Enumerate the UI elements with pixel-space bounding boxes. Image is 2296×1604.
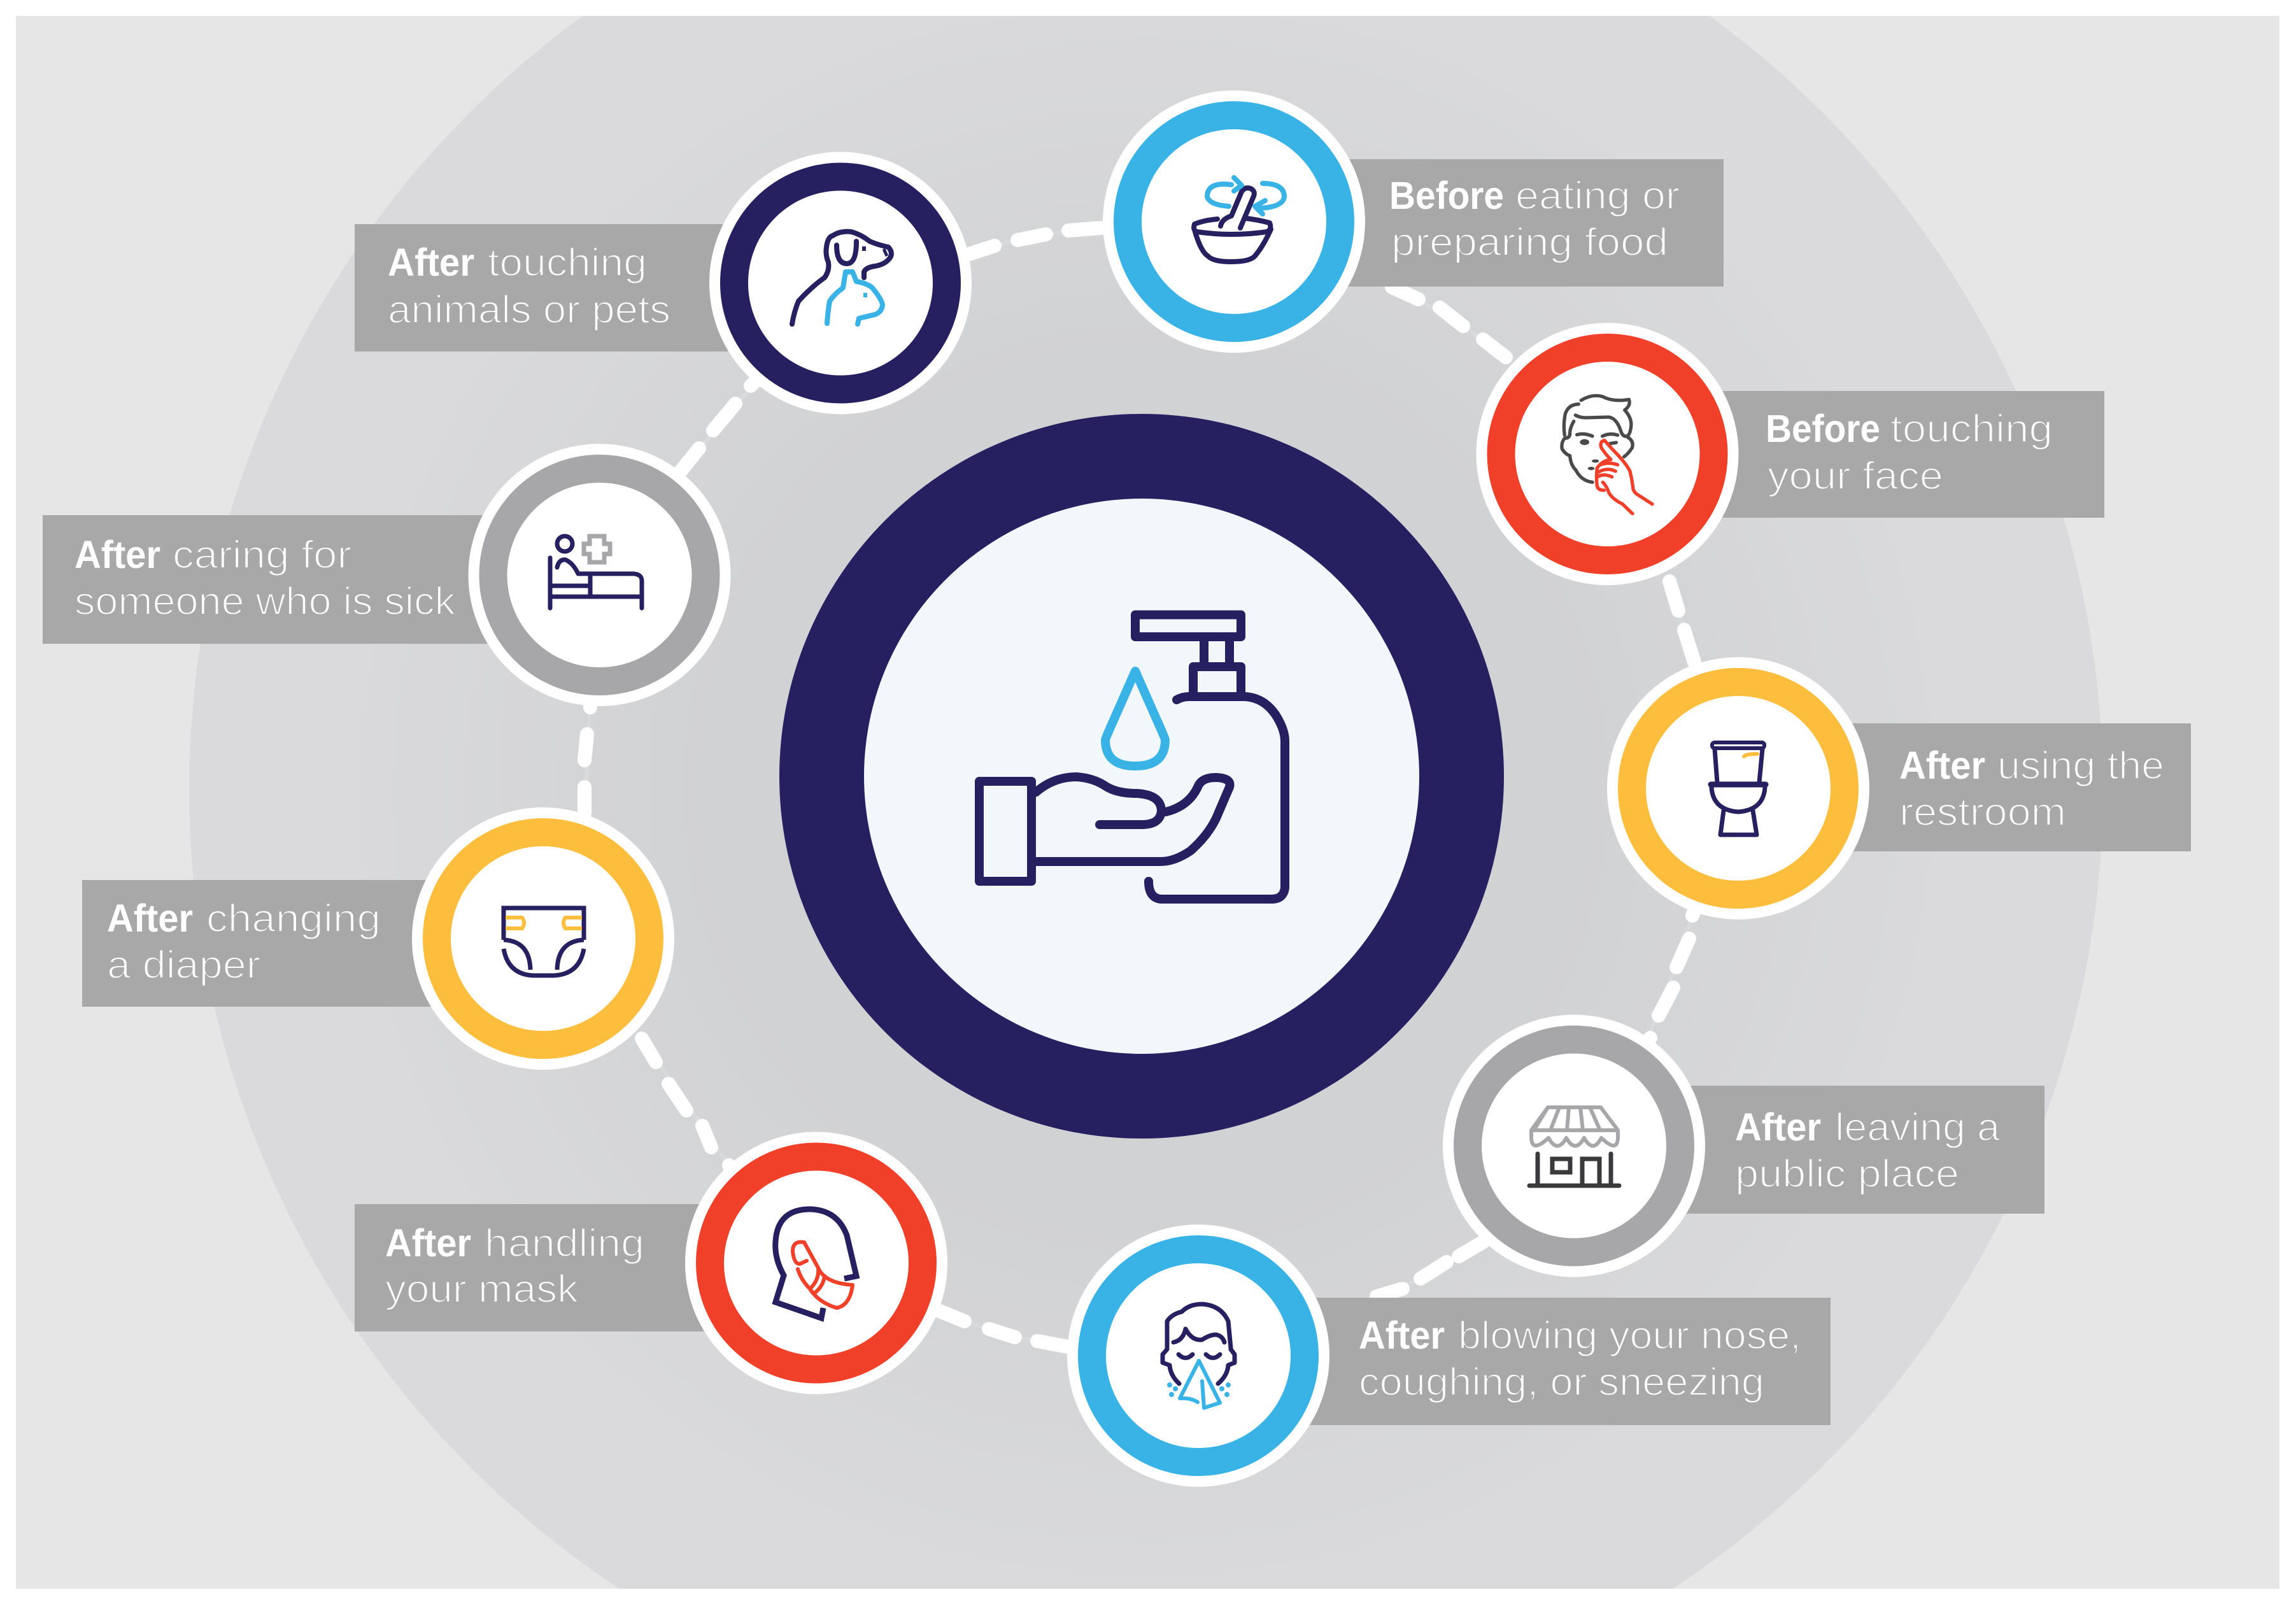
label text	[1766, 407, 2053, 497]
icon: bowl and spoon	[1194, 178, 1284, 262]
step: after touching animals or pets	[355, 152, 972, 414]
label bar	[355, 1204, 816, 1331]
label text: a diaper	[107, 943, 260, 986]
icon: storefront	[1529, 1107, 1619, 1186]
central ring	[779, 414, 1504, 1139]
label text: eating or	[1515, 174, 1680, 217]
label text: someone who is sick	[74, 579, 456, 623]
ring	[685, 1132, 947, 1395]
label bar	[1607, 391, 2104, 518]
step: after leaving a public place	[1443, 1015, 2044, 1277]
label text	[1359, 1314, 1801, 1403]
step: after handling your mask	[355, 1132, 947, 1395]
step: before touching your face	[1476, 323, 2104, 585]
label text	[1899, 744, 2164, 834]
ring	[1607, 657, 1869, 919]
label text: changing	[206, 897, 381, 940]
label text	[1735, 1105, 2000, 1195]
icon: toilet	[1711, 742, 1766, 835]
label text	[74, 533, 456, 623]
label bar	[1574, 1086, 2044, 1214]
icon: patient in bed	[550, 536, 642, 608]
label text	[385, 1221, 644, 1310]
label bar	[82, 880, 543, 1007]
label bar	[1198, 1298, 1831, 1425]
label text: After	[385, 1221, 471, 1265]
label text: Before	[1766, 407, 1880, 450]
label bar	[1234, 159, 1724, 287]
label text: coughing, or sneezing	[1359, 1360, 1764, 1403]
icon: hand and soap dispenser	[979, 615, 1285, 899]
ring	[1476, 323, 1738, 585]
label text: After	[1899, 744, 1985, 787]
ring	[1103, 90, 1365, 353]
step: after caring for someone who is sick	[43, 444, 731, 706]
label text: After	[1359, 1314, 1445, 1357]
label text	[1389, 174, 1680, 264]
label bar	[43, 515, 600, 644]
label text: restroom	[1899, 790, 2066, 834]
label text: handling	[485, 1221, 644, 1265]
ring	[1443, 1015, 1705, 1277]
step: before eating or preparing food	[1103, 90, 1724, 353]
label text: Before	[1389, 174, 1504, 217]
icon: water drop	[1105, 671, 1165, 766]
label text: After	[74, 533, 160, 576]
label text: your face	[1768, 454, 1943, 497]
step: after blowing your nose, coughing, or sneezing	[1067, 1224, 1831, 1487]
icon: dispenser bottle	[1135, 615, 1285, 899]
dashed connector ring	[585, 228, 1696, 1347]
icon: head with mask	[776, 1209, 856, 1318]
label bar	[355, 224, 840, 351]
label text: After	[388, 241, 474, 284]
label text: leaving a	[1835, 1105, 2000, 1149]
label text: caring for	[173, 533, 351, 576]
ring	[709, 152, 972, 414]
icon: person sneezing into tissue	[1163, 1304, 1235, 1408]
label text: touching	[1890, 407, 2053, 450]
label text: using the	[1997, 744, 2164, 787]
ring	[469, 444, 731, 706]
icon: face and hand	[1562, 395, 1652, 514]
label text: touching	[488, 241, 647, 284]
label bar	[1738, 723, 2191, 851]
label text: your mask	[385, 1267, 579, 1310]
label text: After	[107, 897, 193, 940]
ring	[412, 807, 674, 1070]
label text: animals or pets	[388, 288, 670, 331]
step: after using the restroom	[1607, 657, 2191, 919]
label text	[107, 897, 381, 986]
label text: preparing food	[1391, 220, 1668, 264]
icon: diaper	[504, 908, 584, 976]
label text: After	[1735, 1105, 1821, 1149]
label text: blowing your nose,	[1458, 1314, 1801, 1357]
icon: open hand	[979, 777, 1230, 881]
step: after changing a diaper	[82, 807, 674, 1070]
label text	[388, 241, 670, 331]
icon: dog and cat	[792, 232, 891, 324]
label text: public place	[1735, 1152, 1959, 1195]
ring	[1067, 1224, 1329, 1487]
